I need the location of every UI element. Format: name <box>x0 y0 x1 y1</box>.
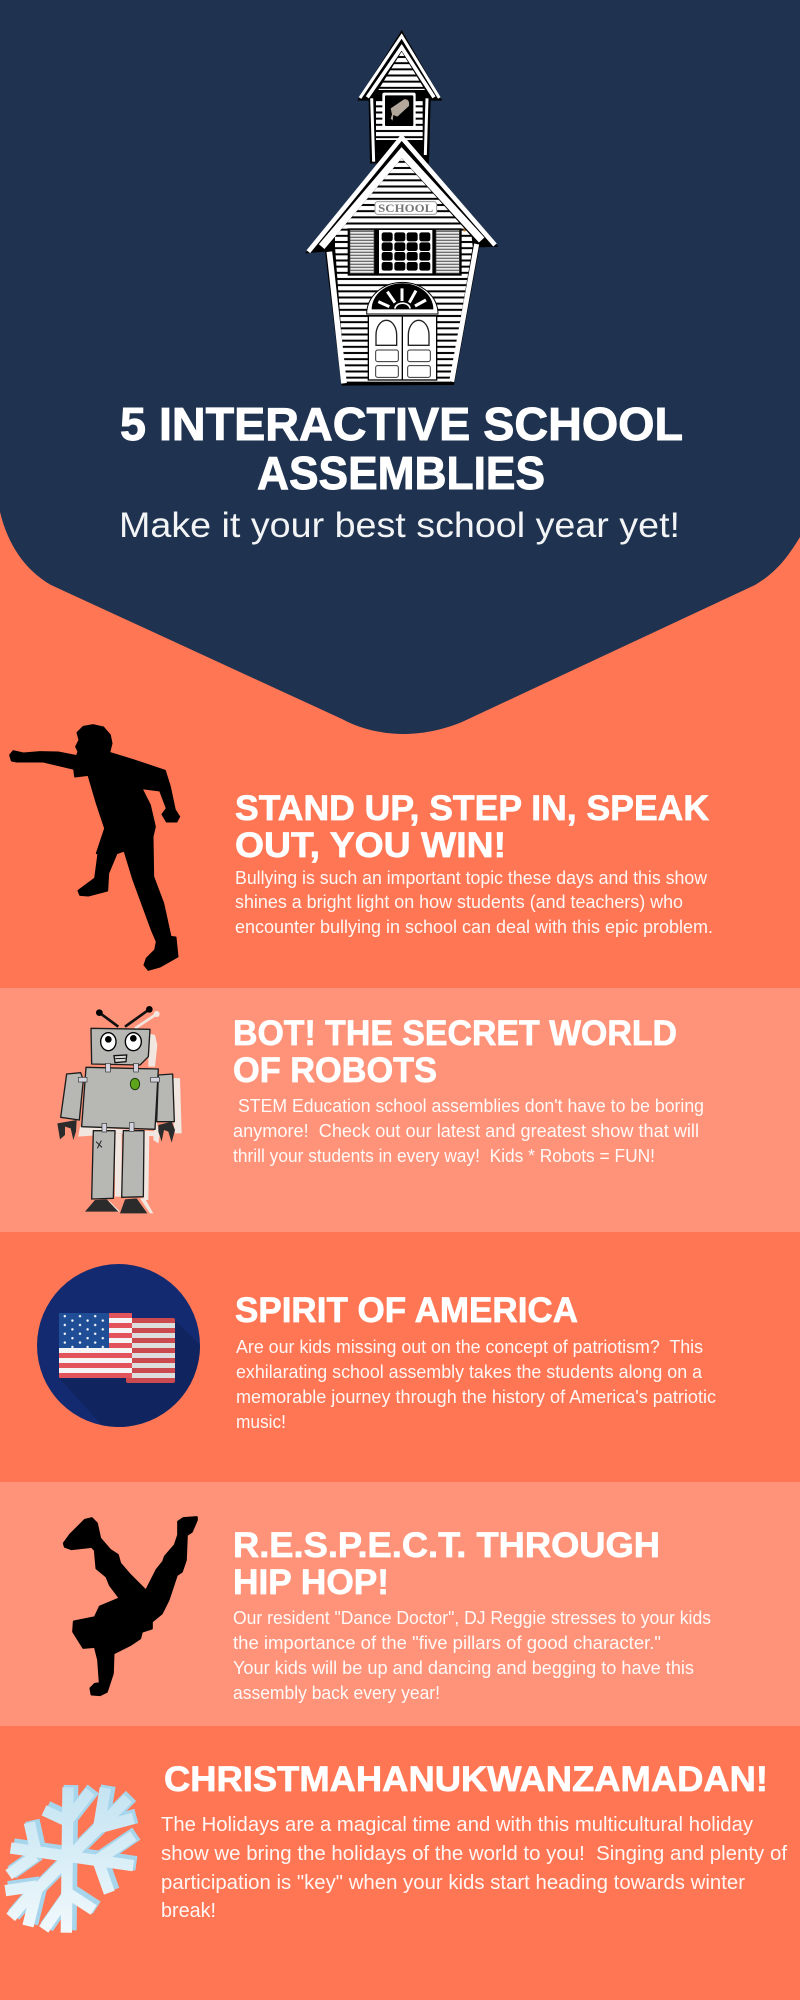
heading: CHRISTMAHANUKWANZAMADAN! <box>164 1760 768 1799</box>
panel: BOT! <box>0 988 800 1232</box>
icon: snowflake <box>5 1785 136 1933</box>
body text: STEM Education school assemblies don't have to be boring <box>238 1096 704 1116</box>
body text <box>235 868 713 937</box>
body text: Our resident "Dance Doctor", DJ Reggie stresses to your kids <box>233 1608 711 1628</box>
heading: BOT! THE SECRET WORLD <box>233 1014 677 1053</box>
panel: Christmahanukwanzamadan <box>5 1760 787 1933</box>
heading <box>233 1526 660 1602</box>
band background <box>0 1482 800 1726</box>
body text: encounter bullying in school can deal with this epic problem. <box>235 917 713 937</box>
body text: show we bring the holidays of the world to you! Singing and plenty of <box>161 1842 787 1865</box>
body text: Bullying is such an important topic these days and this show <box>235 868 708 888</box>
heading: OF ROBOTS <box>233 1051 437 1090</box>
panel: header <box>0 0 800 734</box>
body text: Are our kids missing out on the concept of patriotism? This <box>236 1337 703 1357</box>
icon: American flag in circle <box>37 1264 210 1432</box>
icon: schoolhouse <box>305 30 498 386</box>
icon: breakdancer silhouette <box>64 1517 197 1695</box>
body text: shines a bright light on how students (and teachers) who <box>235 892 683 912</box>
subtitle: Make it your best school year yet! <box>119 506 680 545</box>
body text: participation is "key" when your kids start heading towards winter <box>161 1871 745 1894</box>
body text: the importance of the "five pillars of good character." <box>233 1633 661 1653</box>
panel: Spirit of America <box>37 1264 716 1432</box>
band background <box>0 988 800 1232</box>
body text: break! <box>161 1899 216 1922</box>
body text: assembly back every year! <box>233 1683 440 1703</box>
body text: music! <box>236 1412 286 1432</box>
body text <box>233 1608 711 1703</box>
title <box>120 398 683 499</box>
body text: anymore! Check out our latest and greatest show that will <box>233 1121 699 1141</box>
body text: memorable journey through the history of America's patriotic <box>236 1387 716 1407</box>
icon: schoolhouse: SCHOOL <box>378 203 434 215</box>
body text <box>236 1337 716 1432</box>
heading: OUT, YOU WIN! <box>235 826 506 865</box>
body text <box>233 1096 704 1166</box>
body text: The Holidays are a magical time and with this multicultural holiday <box>161 1813 754 1836</box>
heading: HIP HOP! <box>233 1563 389 1602</box>
icon: punching figure silhouette <box>10 725 179 970</box>
title: 5 INTERACTIVE SCHOOL <box>120 398 683 450</box>
icon: robot <box>57 1006 182 1213</box>
heading <box>235 789 709 865</box>
panel: R.E.S.P.E.C.T. <box>0 1482 800 1726</box>
body text: Your kids will be up and dancing and begging to have this <box>233 1658 694 1678</box>
panel: Stand Up, Step In <box>10 725 713 970</box>
body text <box>161 1813 787 1922</box>
heading <box>233 1014 677 1090</box>
heading: R.E.S.P.E.C.T. THROUGH <box>233 1526 660 1565</box>
body text: exhilarating school assembly takes the students along on a <box>236 1362 703 1382</box>
body text: thrill your students in every way! Kids * Robots = FUN! <box>233 1146 655 1166</box>
heading: STAND UP, STEP IN, SPEAK <box>235 789 709 828</box>
title: ASSEMBLIES <box>257 447 545 499</box>
heading: SPIRIT OF AMERICA <box>235 1291 578 1330</box>
header navy shape <box>0 0 800 734</box>
